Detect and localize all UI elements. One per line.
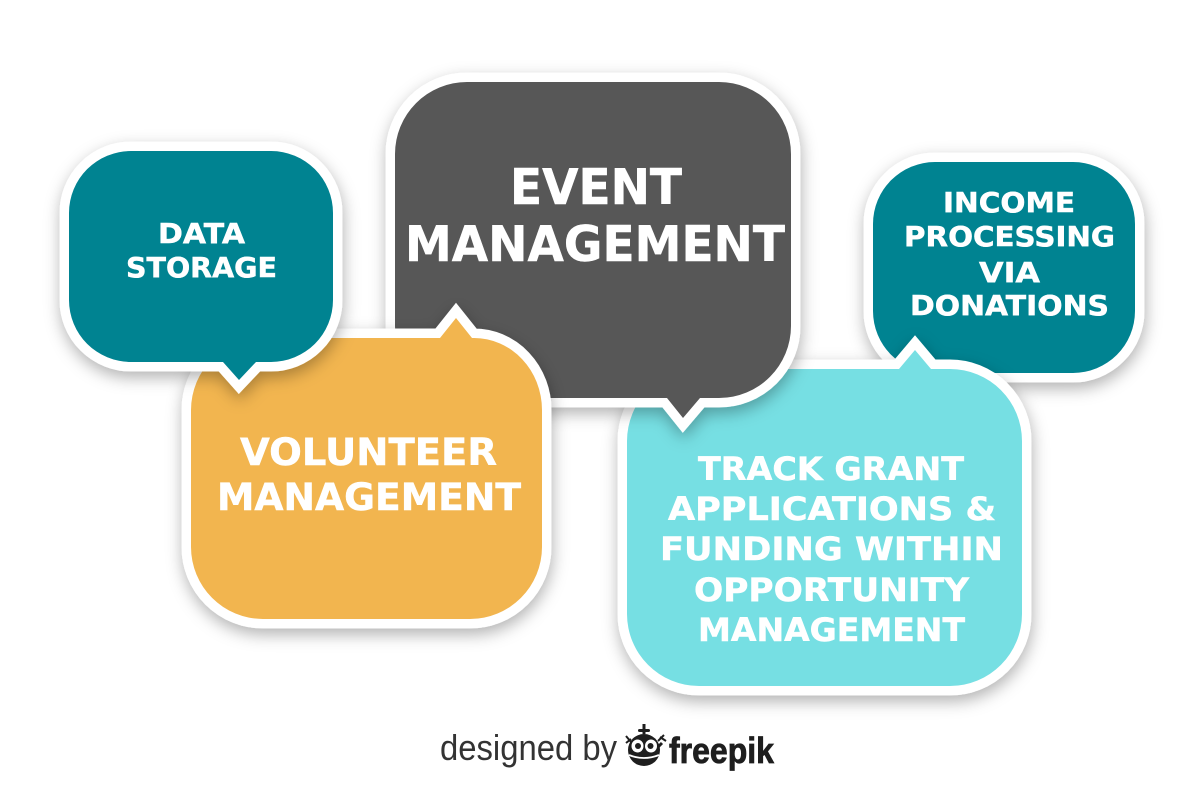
panel: volunteer management [191,318,542,619]
label: track grant: APPLICATIONS & [668,490,996,528]
panel: event management [395,82,791,418]
label: income processing: INCOME [943,186,1075,219]
label: track grant: TRACK GRANT [698,450,964,488]
label: volunteer management: MANAGEMENT [217,476,522,519]
panel: income processing via donations [873,162,1135,373]
label: income processing: VIA [979,256,1040,289]
credit: designed by freepik: freepik [669,730,775,771]
label: data storage: DATA [158,217,245,250]
label: track grant: OPPORTUNITY [694,571,970,609]
label: track grant [660,450,1003,649]
label: income processing: PROCESSING [904,220,1115,253]
label: event management [405,159,786,273]
panel: track grant applications [627,350,1022,686]
label: track grant: MANAGEMENT [698,611,965,649]
label: income processing: DONATIONS [910,289,1109,322]
credit: designed by freepik: designed by [440,727,617,768]
label: volunteer management [217,431,522,519]
panel: data storage [69,151,333,380]
label: track grant: FUNDING WITHIN [660,530,1003,568]
label: data storage: STORAGE [126,251,277,284]
label: event management: EVENT [510,159,683,216]
label: income processing [904,186,1115,322]
icon: freepik mascot [626,724,666,766]
label: event management: MANAGEMENT [405,216,786,273]
label: volunteer management: VOLUNTEER [240,431,497,474]
credit: designed by freepik [440,724,775,771]
label: data storage [126,217,277,284]
